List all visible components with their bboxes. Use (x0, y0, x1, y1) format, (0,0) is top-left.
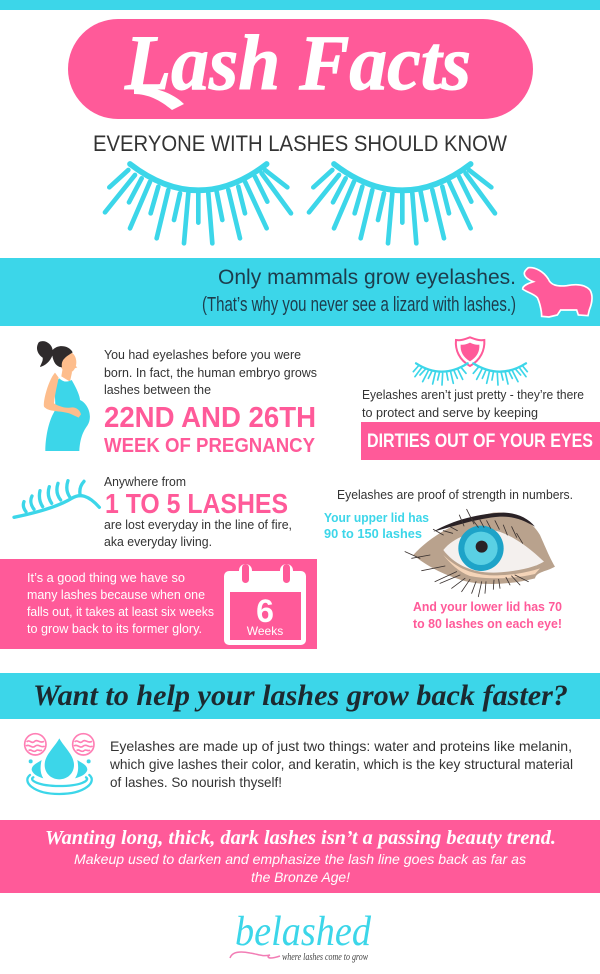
panel: bronze age band: Wanting long, thick, dark lashes isn’t a passing beauty trend. (45, 827, 556, 849)
logo: belashed: where lashes come to grow (282, 952, 368, 963)
text: lower lid: to 80 lashes on each eye! (413, 616, 562, 631)
text: what lashes are made of: of lashes. So nourish thyself! (110, 774, 282, 790)
six weeks text: to grow back to its former glory. (27, 621, 202, 636)
text: what lashes are made of: Eyelashes are made up of just two things: water and proteins like melanin, (110, 738, 572, 754)
text: embryo fact (104, 347, 317, 457)
six weeks text: falls out, it takes at least six weeks (27, 604, 214, 619)
icon: calendar: 6 (256, 593, 274, 629)
mammals text: Only mammals grow eyelashes. (218, 266, 516, 289)
icon: calendar: Weeks (247, 624, 283, 638)
text: upper lid (324, 510, 429, 541)
text: strength in numbers: Eyelashes are proof of strength in numbers. (337, 487, 573, 502)
illustration: eye (405, 509, 555, 597)
stat: 22nd and 26th: 22ND AND 26TH (104, 402, 316, 434)
logo: belashed: belashed (235, 909, 372, 955)
icon: pregnant woman (37, 341, 90, 451)
six weeks text: It’s a good thing we have so (27, 570, 185, 585)
icon: large left eyelash (105, 164, 291, 243)
panel: six weeks (0, 559, 317, 649)
panel: grow back heading band: Want to help your lashes grow back faster? (33, 679, 568, 712)
subtitle: EVERYONE WITH LASHES SHOULD KNOW (93, 131, 507, 156)
title: Lash Facts (124, 19, 471, 106)
text: lost lashes fact: aka everyday living. (104, 534, 212, 549)
callout: dirties (361, 422, 600, 460)
icon: large right eyelash (309, 164, 495, 243)
panel: mammals band (0, 258, 600, 326)
text: lost lashes fact: are lost everyday in the line of fire, (104, 517, 292, 532)
icon: water drop and follicles (25, 734, 94, 794)
icon: calendar (224, 564, 306, 645)
text: lost lashes fact: Anywhere from (104, 474, 186, 489)
icon: hippo (523, 268, 592, 317)
mammals text (202, 266, 516, 316)
text: eyelashes protect (362, 387, 584, 420)
text: upper lid: Your upper lid has (324, 510, 429, 525)
top teal bar (0, 0, 600, 10)
panel: bronze age band: Makeup used to darken and emphasize the lash line goes back as far as (74, 851, 526, 867)
text: embryo fact: lashes between the (104, 382, 211, 397)
title pill (68, 19, 533, 119)
text: eyelashes protect: to protect and serve by keeping (362, 405, 538, 420)
text: what lashes are made of (109, 738, 573, 790)
text: embryo fact: You had eyelashes before you were (104, 347, 301, 362)
text: lower lid: And your lower lid has 70 (413, 599, 562, 614)
panel: bronze age band (0, 820, 600, 893)
six weeks text (27, 570, 214, 636)
text: eyelashes protect: Eyelashes aren’t just pretty - they’re there (362, 387, 584, 402)
text: lost lashes fact (104, 474, 292, 549)
panel: bronze age band: the Bronze Age! (251, 869, 350, 885)
stat: 1 to 5 lashes: 1 TO 5 LASHES (105, 488, 288, 519)
panel: grow back heading band (0, 673, 600, 719)
text: upper lid: 90 to 150 lashes (324, 526, 422, 541)
text: embryo fact: born. In fact, the human embryo grows (104, 365, 317, 380)
icon: fallen lash (14, 481, 99, 517)
six weeks text: many lashes because when one (27, 587, 205, 602)
text: what lashes are made of: which give lashes their color, and keratin, which is the key structural material (109, 756, 573, 772)
icon: lashes with shield (413, 337, 527, 385)
stat: week of pregnancy: WEEK OF PREGNANCY (104, 435, 316, 457)
text: lower lid (413, 599, 562, 631)
